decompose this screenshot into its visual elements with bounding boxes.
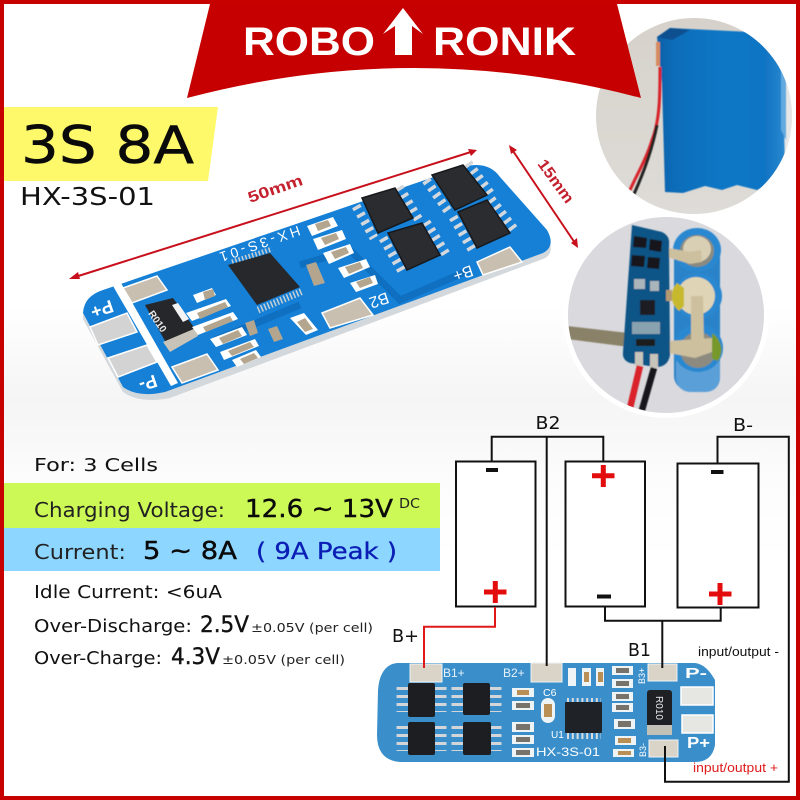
photo: cells with protection board in circle: [560, 210, 770, 420]
flat board MOSFET pins: [422, 687, 476, 751]
battery cell 3: [678, 464, 758, 608]
board silk labels: HX-3S-01: [217, 223, 302, 265]
label: B-: B-: [733, 415, 753, 436]
label: input/output minus: input/output -: [698, 644, 779, 659]
spec: over-charge: Over-Charge:: [34, 648, 162, 669]
spec: over-charge: ±0.05V (per cell): [222, 652, 345, 667]
board silk labels: B+: [451, 261, 475, 284]
trace shading: [215, 250, 470, 340]
photo: battery pack in circle: [596, 18, 792, 214]
dimension: 50mm: [69, 149, 477, 279]
shunt resistor: R010: [145, 309, 168, 335]
circuit board: flat view: [377, 663, 715, 762]
spec band: charging voltage: [4, 483, 440, 528]
board silk labels: [88, 223, 475, 395]
spec: over-discharge: 2.5V: [200, 613, 249, 638]
flat board silk labels: B3+: [637, 668, 647, 684]
board silk labels: B2: [367, 288, 391, 311]
flat board silk labels: HX-3S-01: [536, 745, 600, 759]
wire: B+: [424, 607, 495, 668]
spec band: current: 5 ~ 8A: [143, 536, 237, 565]
battery cell 2: [566, 462, 645, 606]
flat board MOSFET chips: [408, 683, 491, 755]
nickel strips: [663, 247, 712, 358]
spec band: current: ( 9A Peak ): [256, 539, 397, 565]
small circuit board: [623, 225, 672, 368]
battery cell 1: [456, 462, 536, 606]
MOSFET chips: [362, 165, 510, 270]
spec: for cells: For: 3 Cells: [34, 455, 158, 476]
spec: over-discharge: ±0.05V (per cell): [251, 620, 373, 635]
spec: over-charge: 4.3V: [171, 645, 220, 670]
flat board silk labels: [443, 665, 710, 759]
label: B2: B2: [536, 413, 560, 434]
model rating: 3S 8A: [21, 116, 194, 176]
flat board output pads: [681, 687, 713, 733]
spec band: charging voltage: 12.6 ~ 13V: [245, 494, 393, 523]
logo text right: RONIK: [433, 20, 576, 64]
spec band: current: Current:: [34, 540, 126, 564]
flat board controller chip: [565, 702, 602, 735]
wire: B- and output: [665, 437, 789, 782]
edge connector strip: [113, 283, 178, 386]
wire: B1: [605, 607, 721, 668]
spec: idle current: Idle Current: <6uA: [34, 582, 223, 603]
board silk labels: P-: [136, 371, 160, 395]
dimension: 50mm: 50mm: [246, 172, 305, 207]
controller chip: [228, 249, 303, 310]
dimension: 15mm: 15mm: [534, 156, 577, 207]
label: input/output plus: input/output +: [693, 760, 778, 775]
logo text left: ROBO: [243, 20, 375, 64]
MOSFET pins: [356, 163, 516, 273]
model number: HX-3S-01: [20, 182, 155, 211]
flat board shunt resistor: R010: [653, 696, 664, 720]
banner: [187, 4, 641, 98]
shunt resistor: [145, 298, 198, 352]
battery cell stack: [672, 228, 723, 392]
wire: B2: [492, 437, 603, 666]
spec band: charging voltage: Charging Voltage:: [34, 498, 225, 522]
flat board shunt resistor: [647, 690, 672, 735]
flat board silk labels: P-: [685, 665, 707, 682]
spec: over-discharge: [34, 613, 373, 638]
board silk labels: P+: [88, 296, 116, 322]
flat board silk labels: B3-: [638, 743, 648, 757]
spec: over-discharge: Over-Discharge:: [34, 616, 192, 637]
product badge: [4, 107, 218, 181]
spec band: current: [4, 528, 440, 571]
spec: over-charge: [34, 645, 345, 670]
label: B+: B+: [392, 626, 419, 647]
flat board silk labels: C6: [543, 687, 557, 699]
label: B1: B1: [628, 640, 651, 661]
solder pads: [90, 247, 522, 383]
small resistors and capacitors: [186, 217, 378, 367]
flat board pads: [410, 663, 678, 757]
spec band: charging voltage: DC: [399, 497, 420, 512]
flat board silk labels: B1+: [443, 666, 465, 680]
logo arrow: [383, 8, 423, 55]
circuit board: isometric view: [83, 163, 551, 400]
flat board silk labels: P+: [687, 735, 710, 752]
flat board silk labels: B2+: [503, 666, 525, 680]
dimension: 15mm: [509, 145, 578, 248]
flat board silk labels: U1: [551, 730, 564, 741]
flat board small components: [512, 666, 636, 757]
